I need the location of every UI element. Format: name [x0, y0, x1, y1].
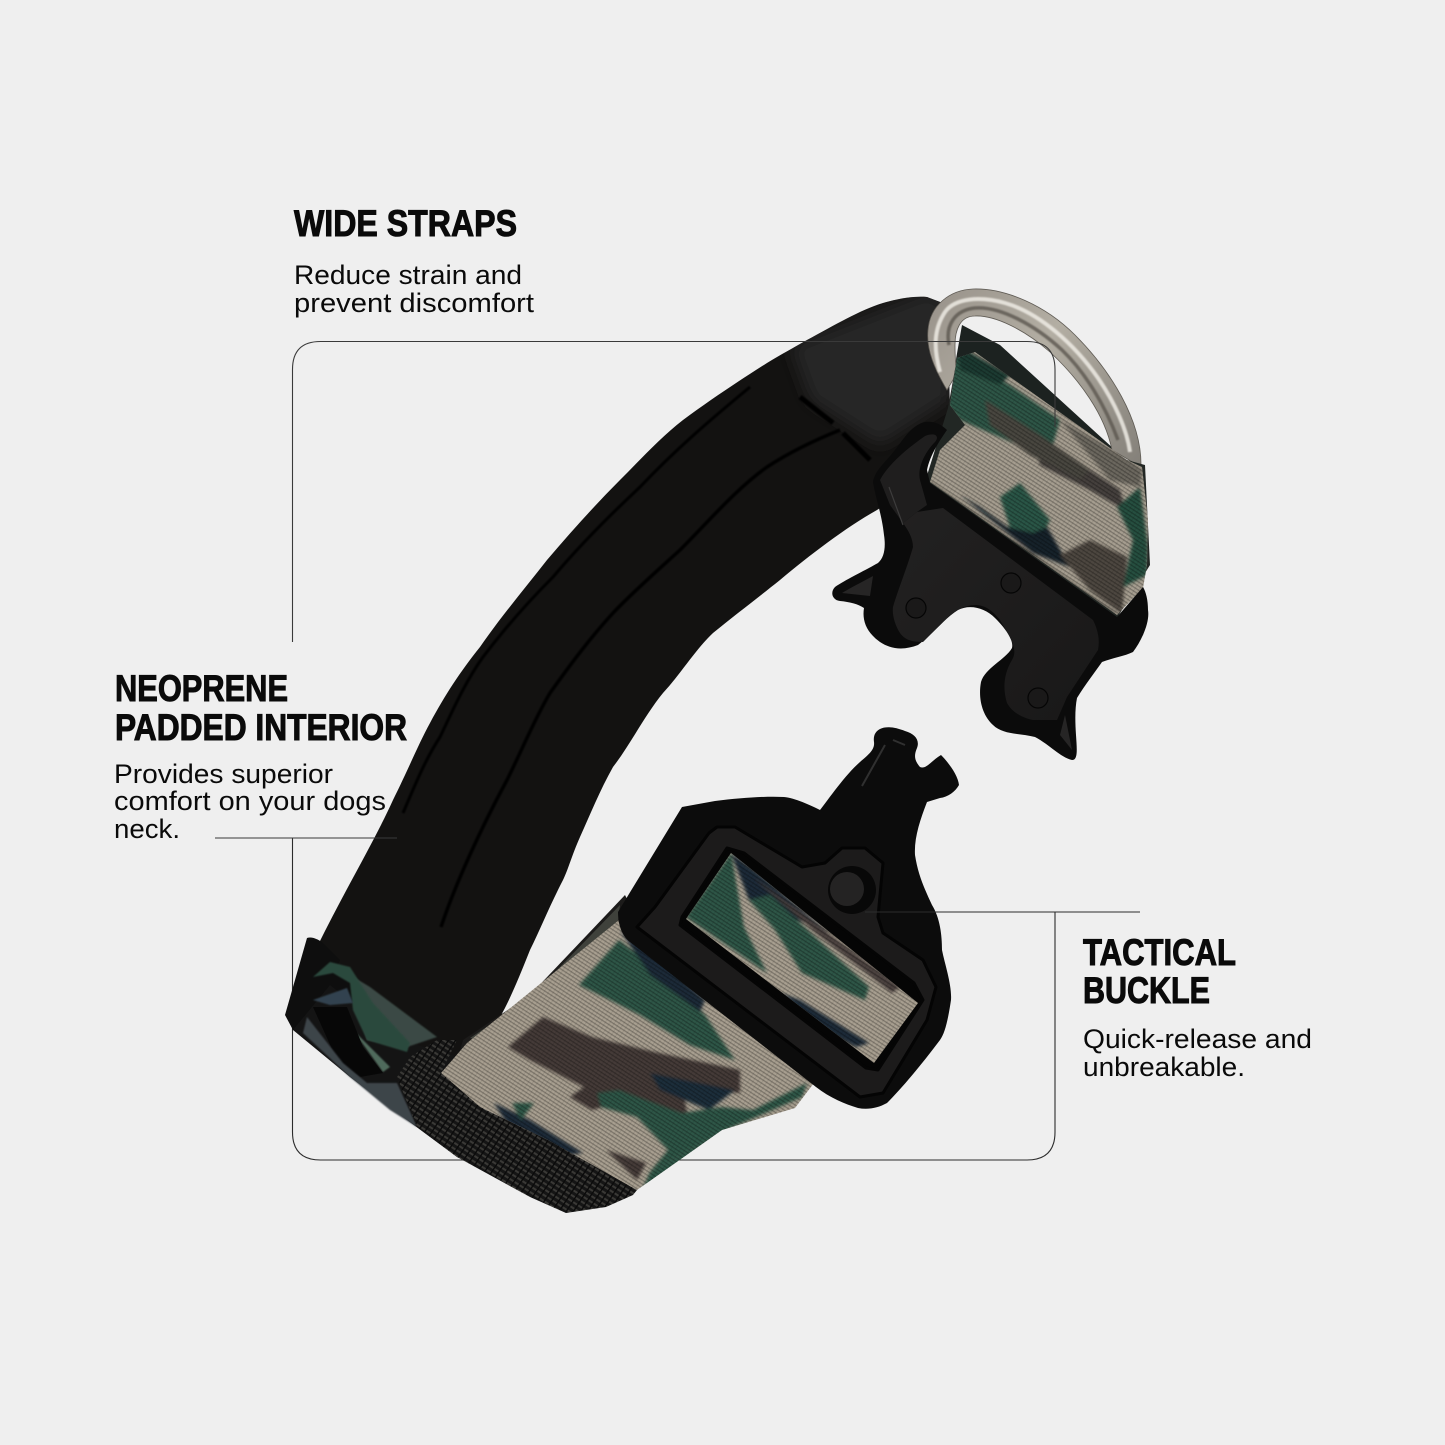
- buckle upper lobe: [880, 434, 937, 523]
- text: buckle description: Quick-release and: [1083, 1024, 1312, 1054]
- text: wide straps description: [294, 260, 535, 318]
- collar product illustration: [285, 289, 1160, 1213]
- buckle raised plate: [637, 827, 936, 1097]
- D-ring: [928, 289, 1141, 467]
- bottom buckle half: [618, 727, 959, 1109]
- top camo webbing: [928, 352, 1150, 617]
- rear strap seen behind D-ring: [955, 325, 1127, 465]
- text: buckle description: [1083, 1024, 1312, 1082]
- tail black gap: [313, 1007, 383, 1077]
- buckle tooth sheen: [842, 576, 1072, 750]
- tail underside: [293, 985, 500, 1170]
- leader line: lower frame behind the collar: [292, 838, 1055, 1160]
- neoprene seams: [403, 387, 870, 927]
- tail lower fold: [353, 1030, 390, 1072]
- text: neoprene description: neck.: [114, 814, 180, 844]
- heading: tactical buckle: BUCKLE: [1083, 970, 1210, 1011]
- neoprene upper sheen: [790, 290, 955, 445]
- bottom camo strap: [441, 895, 813, 1190]
- tail dark backing: [300, 945, 410, 1085]
- heading: neoprene padded interior: [115, 668, 407, 748]
- text: wide straps description: Reduce strain and: [294, 260, 522, 290]
- neoprene padded strap: [318, 297, 950, 1065]
- buckle plate: [893, 508, 1099, 720]
- leader line: upper frame over the collar: [292, 342, 1055, 642]
- heading: neoprene padded interior: PADDED INTERIOR: [115, 707, 407, 748]
- top buckle half: [832, 422, 1148, 760]
- leader line: neoprene callout: [215, 837, 397, 839]
- heading: tactical buckle: [1083, 932, 1236, 1011]
- slide buckle: [285, 937, 340, 1030]
- camo webbing in window: [686, 853, 918, 1063]
- tail lower camo edge: [303, 1017, 417, 1127]
- window rim: [680, 848, 923, 1070]
- webbing keeper loop: [397, 1040, 637, 1213]
- heading: tactical buckle: TACTICAL: [1083, 932, 1236, 973]
- tongue highlight: [862, 740, 905, 786]
- heading: wide straps: WIDE STRAPS: [294, 203, 517, 244]
- tail camo backing: [350, 975, 437, 1047]
- text: neoprene description: comfort on your dogs: [114, 786, 386, 816]
- leader line: buckle callout: [865, 911, 1140, 913]
- text: wide straps description: prevent discomfort: [294, 288, 535, 318]
- text: buckle description: unbreakable.: [1083, 1052, 1245, 1082]
- left slide and tail webbing: [285, 937, 500, 1170]
- buckle highlight: [889, 487, 903, 525]
- release button: [828, 866, 876, 914]
- text: neoprene description: [114, 759, 386, 844]
- callout: tactical buckle: [1083, 932, 1312, 1082]
- callout: wide straps: [294, 203, 535, 318]
- text: neoprene description: Provides superior: [114, 759, 333, 789]
- buckle rivets: [906, 573, 1048, 708]
- tail navy loop: [313, 988, 353, 1005]
- heading: neoprene padded interior: NEOPRENE: [115, 668, 288, 709]
- callout: neoprene padded interior: [114, 668, 407, 844]
- tail green fold: [313, 962, 410, 1052]
